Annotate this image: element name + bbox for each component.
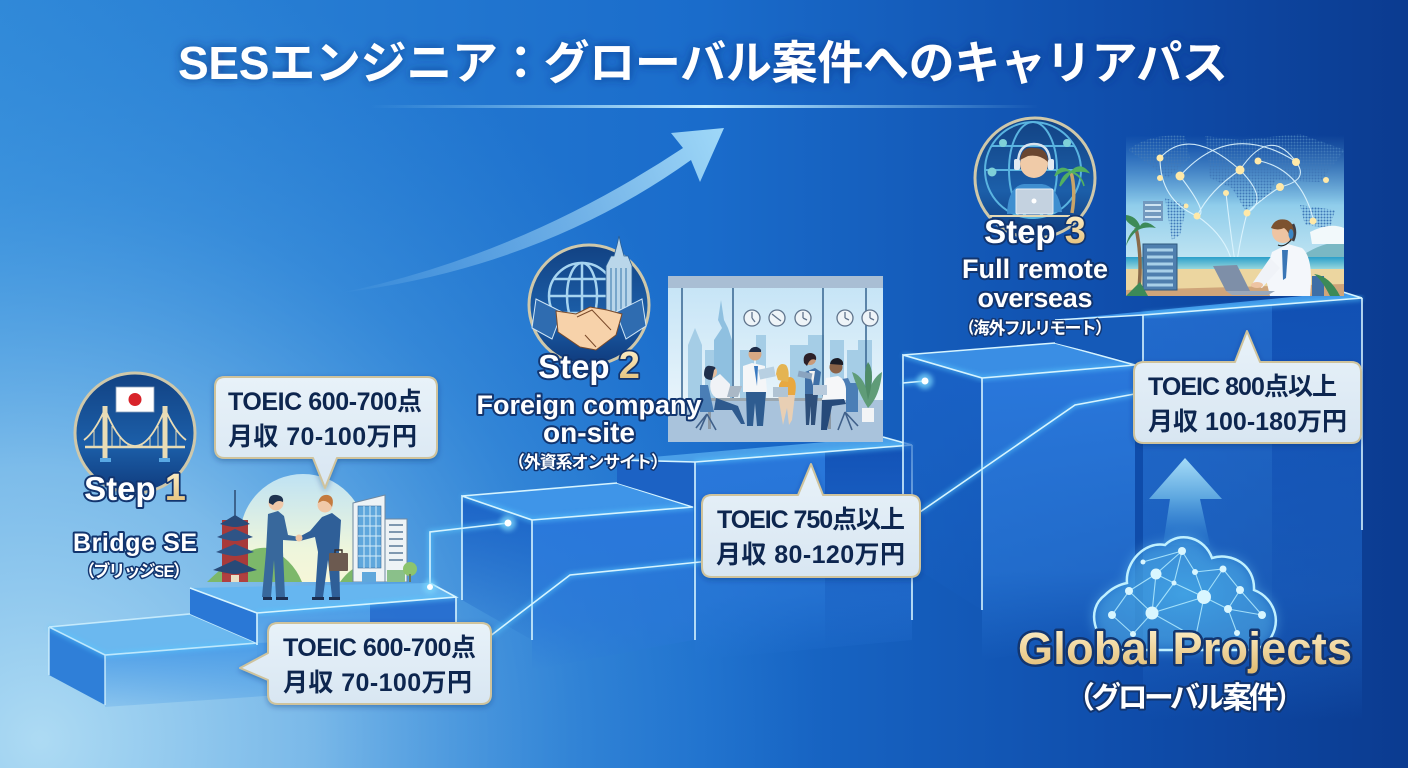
panel: step 2 badge and label — [476, 236, 702, 472]
clocks — [744, 310, 878, 326]
global projects heading: Global Projects — [1018, 623, 1352, 674]
callout: step 1 upper: 月収 70-100万円 — [228, 423, 417, 451]
step 2 heading: Step 2 — [538, 345, 640, 387]
callout: step 3: 月収 100-180万円 — [1148, 408, 1347, 436]
network nodes — [1156, 154, 1329, 224]
icon: remote worker badge — [975, 118, 1095, 238]
illustration: remote work beach and network map — [1126, 134, 1344, 296]
icon: globe, skyscraper and handshake badge — [529, 236, 649, 365]
icon: bridge badge with Japan flag — [75, 373, 195, 493]
step 2 name line 1: Foreign company — [476, 390, 702, 420]
title underline glow — [370, 105, 1040, 108]
palm tree — [1125, 215, 1156, 296]
step 2 japanese name: （外資系オンサイト） — [508, 453, 668, 472]
stair: step 2 upper — [617, 437, 912, 660]
callout: step 3 — [1134, 331, 1361, 443]
step 3 japanese name: （海外フルリモート） — [958, 319, 1112, 338]
meeting table and people — [696, 347, 882, 430]
figures: handshake — [262, 495, 348, 600]
callout: step 3: TOEIC 800点以上 — [1148, 373, 1337, 401]
title: SESエンジニア：グローバル案件へのキャリアパス — [178, 37, 1228, 89]
step 1 japanese name: （ブリッジSE） — [78, 561, 190, 581]
step 3 name line 1: Full remote — [962, 254, 1108, 284]
callout: step 1 upper — [215, 377, 437, 488]
panel: step 3 scene — [1126, 134, 1344, 296]
icon: network cloud — [1094, 537, 1276, 650]
icon: office buildings — [353, 495, 417, 582]
network arcs — [1160, 144, 1313, 262]
skyline — [688, 300, 872, 400]
step 1 name: Bridge SE — [73, 529, 197, 557]
panel: step 2 scene — [668, 276, 883, 442]
panel: step 1 badge and label — [73, 373, 197, 581]
staircase — [49, 292, 1362, 720]
callout: step 1 lower: 月収 70-100万円 — [283, 669, 472, 697]
panel: step 1 scene — [207, 474, 417, 600]
stair: step 3 upper — [1055, 292, 1362, 720]
callout: step 2 — [702, 464, 920, 577]
step 1 heading: Step 1 — [84, 467, 186, 509]
stair: step 1 lower — [49, 614, 280, 707]
step 3 name line 2: overseas — [978, 283, 1092, 313]
arrow: upward from cloud — [1149, 458, 1222, 545]
stair: step 3 lower — [903, 343, 1135, 660]
stair: step 1 upper — [190, 583, 456, 670]
callout: step 1 lower: TOEIC 600-700点 — [283, 634, 476, 662]
callout: step 1 lower — [240, 623, 491, 704]
illustration: bridge SE handshake — [207, 474, 417, 582]
panel: step 3 badge and label — [958, 118, 1112, 338]
illustration: foreign office meeting — [668, 276, 883, 442]
stair: step 2 lower — [462, 483, 693, 670]
icon: pagoda — [213, 490, 257, 582]
remote worker — [1213, 219, 1340, 296]
server rack — [1143, 201, 1177, 290]
global projects japanese: （グローバル案件） — [1065, 682, 1305, 715]
step 2 name line 2: on-site — [543, 417, 635, 448]
arrow: rising career curve — [340, 128, 724, 293]
callout: step 1 upper: TOEIC 600-700点 — [228, 388, 422, 416]
callout: step 2: 月収 80-120万円 — [716, 541, 905, 569]
world map — [1128, 134, 1345, 240]
step 3 heading: Step 3 — [984, 210, 1086, 252]
glowing connector lines — [423, 373, 1140, 640]
callout: step 2: TOEIC 750点以上 — [717, 506, 905, 534]
panel: global projects — [1018, 458, 1352, 715]
